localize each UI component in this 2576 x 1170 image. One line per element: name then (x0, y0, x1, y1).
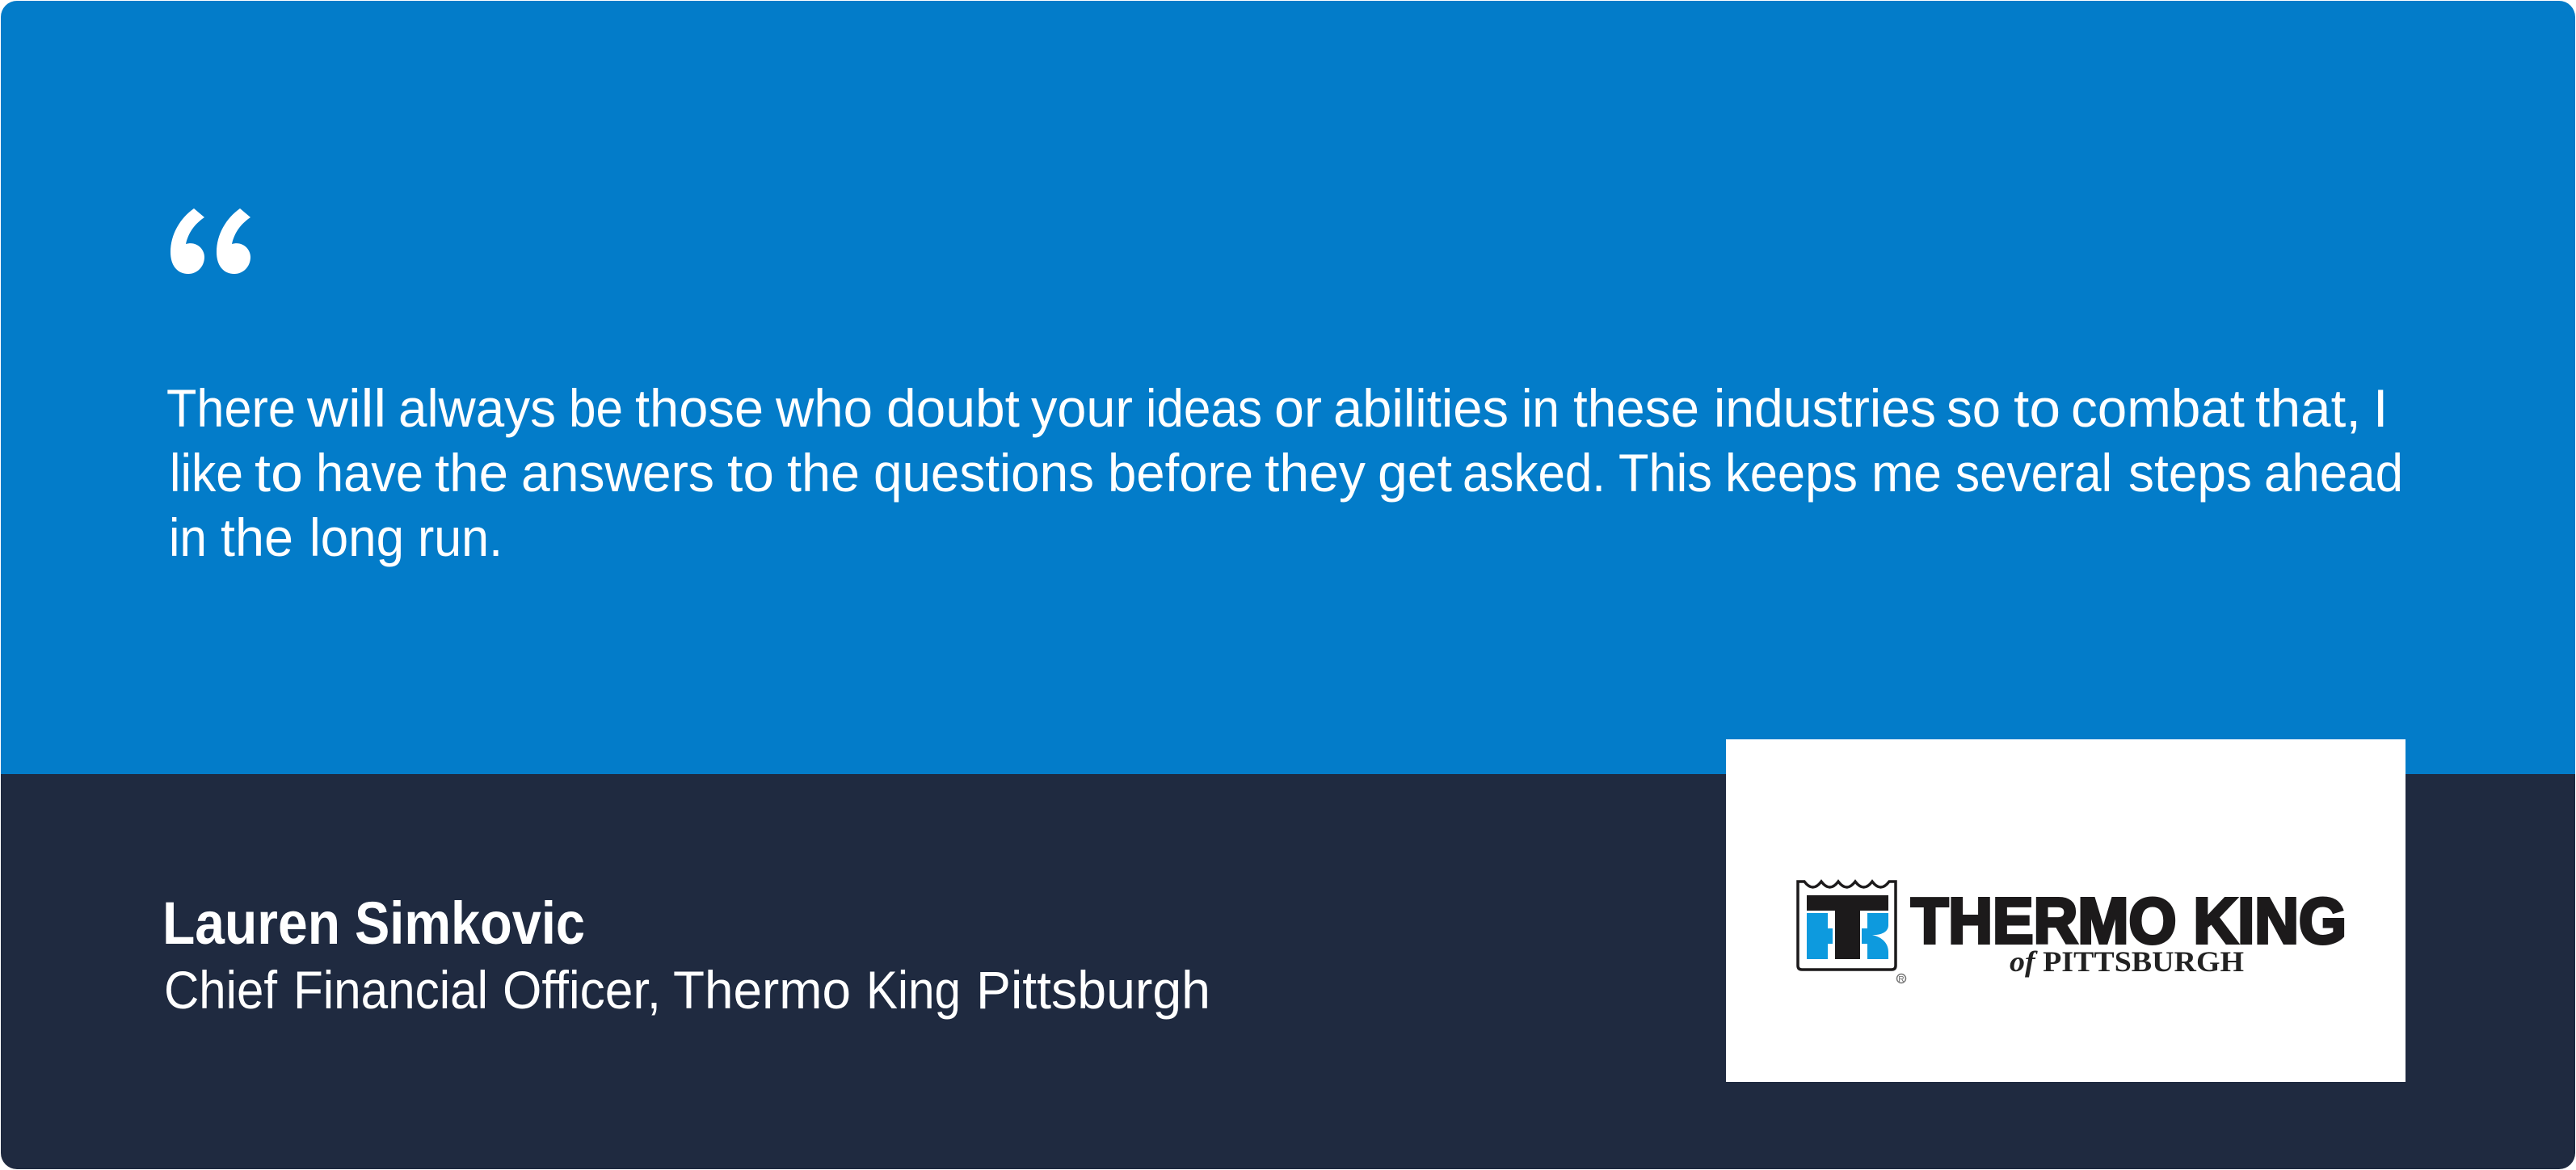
icon: quotation mark (170, 208, 250, 274)
logo subline: of PITTSBURGH (2010, 945, 2244, 978)
quote text: will (306, 378, 386, 438)
quote text: There (166, 378, 296, 438)
quote text: to (255, 443, 303, 503)
speaker role: Pittsburgh (976, 960, 1210, 1020)
quote text: always (398, 378, 556, 438)
quote text: to (727, 443, 774, 503)
quote text: combat (2071, 378, 2245, 438)
registered mark (1897, 974, 1905, 984)
quote text: to (2014, 378, 2060, 438)
quote text: ahead (2264, 443, 2403, 503)
quote text: ideas (1146, 378, 1262, 438)
quote text: they (1265, 443, 1366, 503)
logo wordmark: THERMO KING (1911, 885, 2347, 957)
speaker role: Chief (164, 960, 278, 1020)
quote text: or (1274, 378, 1322, 438)
icon: Thermo King emblem (1798, 882, 1896, 970)
quote text: asked. (1463, 443, 1606, 503)
quote text: like (170, 443, 243, 503)
quote text: industries (1714, 378, 1936, 438)
quote text: the (221, 507, 293, 567)
quote text: I (2373, 378, 2388, 438)
quote text: This (1618, 443, 1712, 503)
quote text: steps (2128, 443, 2252, 503)
quote text: questions (873, 443, 1094, 503)
speaker role: Financial (293, 960, 488, 1020)
quote text: who (775, 378, 873, 438)
quote text: several (1955, 443, 2112, 503)
registered mark: R (1898, 975, 1905, 984)
quote text: long (309, 507, 404, 567)
quote text: your (1031, 378, 1133, 438)
speaker role: King (866, 960, 961, 1020)
quote text: answers (521, 443, 714, 503)
speaker name (162, 890, 585, 957)
quote text: abilities (1333, 378, 1509, 438)
quote text: get (1378, 443, 1452, 503)
quote text: have (316, 443, 423, 503)
quote text: those (635, 378, 764, 438)
logo card (1726, 739, 2406, 1082)
quote text: in (169, 507, 207, 567)
quote text (166, 378, 2403, 567)
quote text: so (1947, 378, 2001, 438)
speaker role (164, 960, 1210, 1020)
quote text: the (435, 443, 508, 503)
panel: attribution (1, 774, 2575, 1169)
quote text: doubt (886, 378, 1020, 438)
speaker role: Officer, (503, 960, 661, 1020)
speaker name: Lauren (162, 890, 340, 957)
quote text: the (787, 443, 860, 503)
panel: quote (1, 1, 2575, 774)
speaker name: Simkovic (355, 890, 585, 957)
quote text: in (1522, 378, 1559, 438)
quote text: that, (2255, 378, 2361, 438)
quote text: me (1871, 443, 1942, 503)
quote text: before (1108, 443, 1253, 503)
quote text: keeps (1725, 443, 1858, 503)
speaker role: Thermo (673, 960, 851, 1020)
quote text: be (569, 378, 623, 438)
quote text: run. (418, 507, 503, 567)
quote text: these (1573, 378, 1699, 438)
